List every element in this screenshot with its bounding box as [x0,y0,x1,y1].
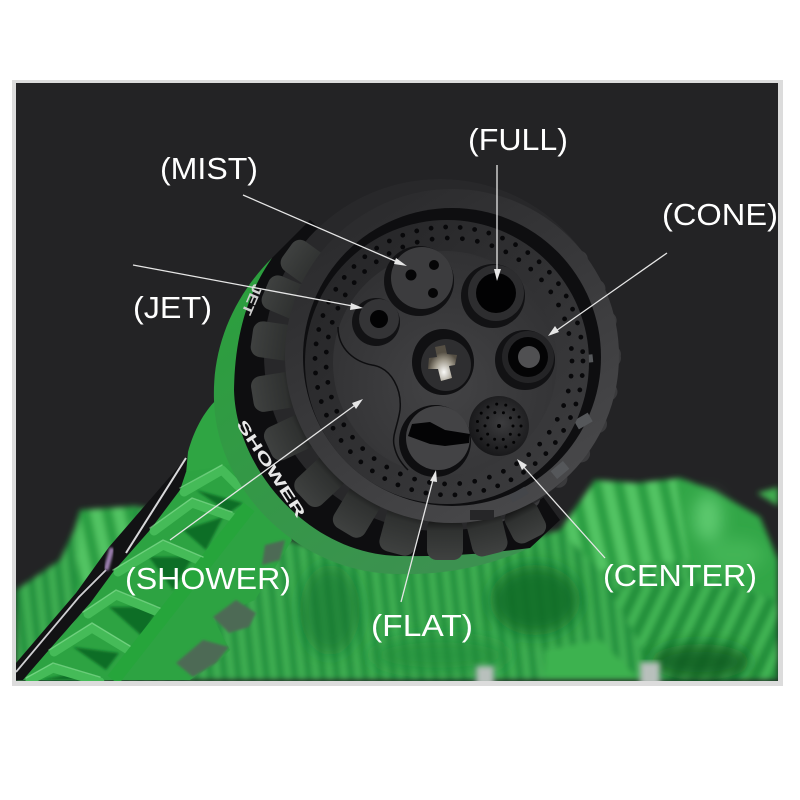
cone outlet [495,330,555,390]
dark gaps between ribs [40,490,243,680]
arrow: mist [243,195,407,266]
mist hole rings [315,227,583,495]
dark background [16,83,778,681]
spine of hose [113,507,249,680]
grey blocks beside the spine [176,540,285,677]
flat outlet [399,405,471,477]
screw hub [412,329,474,395]
recessed well [303,208,601,506]
gray blurred gaps in the hose [476,662,660,686]
label: SHOWER: (SHOWER) [125,561,291,596]
rib highlights [26,465,232,678]
knob ring [285,189,619,523]
label: MIST: (MIST) [160,151,258,186]
product photo infographic [12,80,783,686]
label: CONE: (CONE) [662,197,778,232]
arrow: cone [548,253,667,336]
arrow: flat [401,470,437,602]
center outlet dome [469,396,529,456]
rim text: SHOWER: SHOWER [233,417,309,521]
black inner rim [234,220,560,556]
arrow: jet [133,265,363,310]
photo frame [12,80,783,686]
rim text: JET: JET [239,282,266,318]
green rim [214,258,530,574]
blurred green hose coils [16,478,778,680]
full outlet [461,264,525,328]
well tabs [470,354,593,520]
rear knob band [264,186,564,530]
green collar behind head [186,402,230,472]
arrow: center [517,459,605,558]
label: FLAT: (FLAT) [371,608,473,643]
black tube with white highlight [16,457,190,680]
grip fins [249,236,550,560]
stem silhouette [23,465,292,680]
shower lobe outline [338,327,408,470]
central plate [333,269,499,436]
spray dish [305,220,589,504]
arrow: shower [170,399,363,540]
mist outlet [384,246,454,316]
spray nozzle head [214,179,619,574]
photo panel [16,83,778,686]
label: JET: (JET) [133,290,212,325]
scalloped knob edge [502,251,621,522]
arrow: full [494,165,501,281]
ribbed green hose stem [23,465,292,682]
rib faces [30,470,238,682]
soft hose shading [300,494,765,680]
label: FULL: (FULL) [468,122,568,157]
jet outlet [352,298,400,346]
label: CENTER: (CENTER) [603,558,757,593]
